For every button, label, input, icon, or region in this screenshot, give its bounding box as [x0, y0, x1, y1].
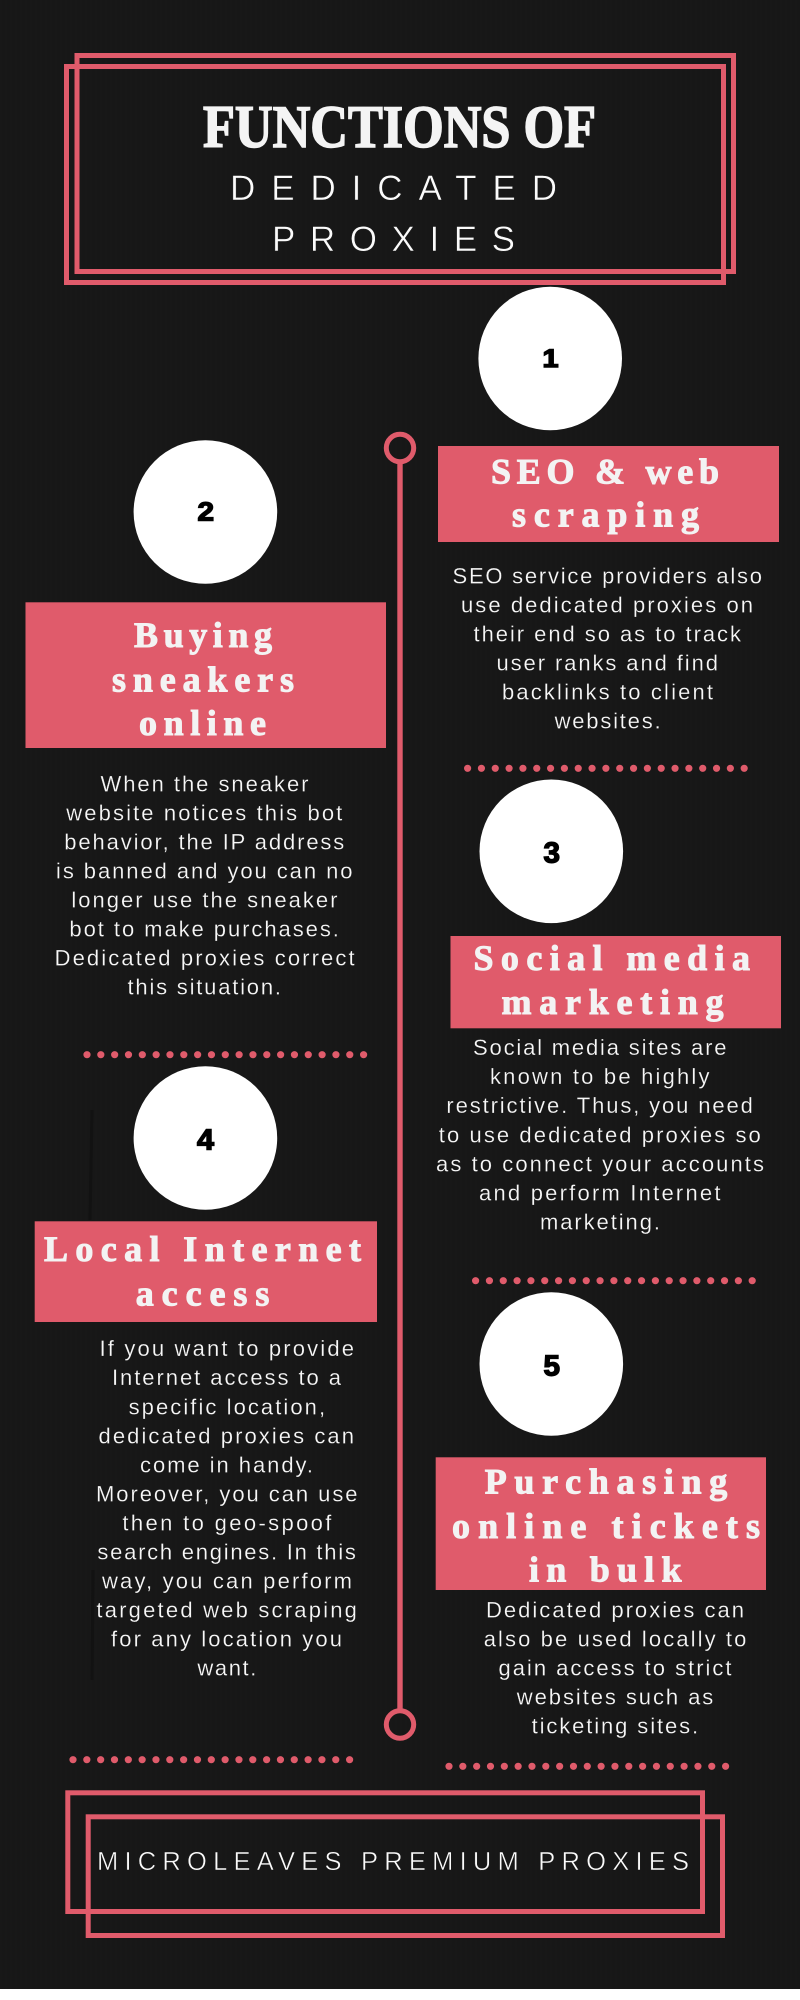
- body text 2: is banned and you can no: [56, 859, 352, 884]
- number circle 2: 2: [198, 496, 214, 526]
- heading box 2: Buying: [134, 615, 272, 655]
- dotted divider right 3: [449, 1763, 726, 1770]
- body text 5: gain access to strict: [498, 1655, 732, 1680]
- number circle 5: [480, 1292, 623, 1436]
- body text 1: backlinks to client: [502, 679, 713, 704]
- body text 2: longer use the sneaker: [71, 888, 337, 913]
- heading box 4: [35, 1221, 377, 1322]
- number circle 5: 5: [544, 1350, 560, 1382]
- body text 3: as to connect your accounts: [436, 1151, 764, 1176]
- body text 3: marketing.: [540, 1209, 660, 1234]
- body text 2: website notices this bot: [65, 801, 342, 826]
- header title frame: [66, 56, 734, 282]
- body text 2: behavior, the IP address: [64, 830, 344, 855]
- step 1: SEO and web scraping: [438, 287, 779, 733]
- body text 1: websites.: [554, 708, 661, 733]
- body text 4: Internet access to a: [112, 1365, 342, 1390]
- body text 5: ticketing sites.: [532, 1713, 698, 1738]
- body text 4: search engines. In this: [97, 1539, 356, 1564]
- body text 4: then to geo-spoof: [122, 1510, 332, 1535]
- body text 3: Social media sites are: [473, 1035, 726, 1060]
- body text 1: [452, 563, 762, 733]
- heading box 1: [438, 446, 779, 542]
- heading box 4: Local Internet: [44, 1229, 361, 1269]
- heading box 2: sneakers: [112, 660, 294, 700]
- body text 4: Moreover, you can use: [96, 1481, 358, 1506]
- body text 2: Dedicated proxies correct: [55, 946, 355, 971]
- step 3: social media marketing: [436, 780, 781, 1234]
- body text 5: Dedicated proxies can: [486, 1597, 744, 1622]
- title: dedicated: DEDICATED: [230, 169, 557, 208]
- heading box 5: online tickets: [452, 1506, 760, 1546]
- footer frame: [68, 1793, 723, 1936]
- number circle 2: [134, 440, 277, 584]
- number circle 1: 1: [542, 345, 559, 373]
- heading box 2: online: [139, 703, 266, 743]
- body text 4: dedicated proxies can: [98, 1423, 354, 1448]
- number circle 3: 3: [544, 838, 560, 870]
- step 5: purchasing online tickets in bulk: [436, 1292, 766, 1738]
- timeline: [386, 434, 414, 1738]
- dotted divider left 1: [87, 1051, 364, 1058]
- body text 3: restrictive. Thus, you need: [446, 1093, 753, 1118]
- heading box 4: access: [136, 1273, 269, 1313]
- body text 3: known to be highly: [490, 1064, 710, 1089]
- heading box 1: scraping: [512, 495, 699, 535]
- body text 2: this situation.: [128, 975, 281, 1000]
- number circle 4: 4: [197, 1124, 214, 1156]
- dotted divider right 1: [468, 765, 746, 772]
- body text 1: use dedicated proxies on: [461, 592, 753, 617]
- dotted divider right 2: [476, 1277, 753, 1284]
- heading box 2: [26, 602, 386, 748]
- body text 3: to use dedicated proxies so: [439, 1122, 761, 1147]
- body text 5: websites such as: [516, 1684, 713, 1709]
- heading box 3: marketing: [502, 982, 724, 1022]
- body text 4: targeted web scraping: [96, 1597, 357, 1622]
- heading box 5: Purchasing: [485, 1461, 727, 1501]
- heading box 3: Social media: [474, 938, 750, 978]
- heading box 1: SEO & web: [491, 451, 719, 491]
- body text 4: for any location you: [111, 1626, 342, 1652]
- body text 1: user ranks and find: [496, 650, 718, 675]
- body text 4: specific location,: [129, 1394, 325, 1419]
- body text 2: bot to make purchases.: [69, 917, 339, 942]
- footer text: MICROLEAVES PREMIUM PROXIES: [97, 1848, 689, 1876]
- body text 3: and perform Internet: [479, 1180, 720, 1205]
- body text 5: also be used locally to: [484, 1626, 746, 1651]
- body text 4: want.: [196, 1655, 256, 1680]
- body text 4: way, you can perform: [101, 1568, 352, 1593]
- body text 1: SEO service providers also: [452, 563, 762, 588]
- body text 5: [484, 1597, 746, 1738]
- title: proxies: PROXIES: [272, 220, 515, 259]
- title: functions of: FUNCTIONS OF: [203, 94, 596, 160]
- body text 2: When the sneaker: [100, 772, 308, 797]
- body text 1: their end so as to track: [474, 621, 742, 646]
- body text 4: If you want to provide: [100, 1336, 354, 1361]
- body text 4: come in handy.: [140, 1452, 313, 1477]
- body text 2: [55, 772, 355, 1000]
- body text 3: [436, 1035, 764, 1234]
- step 4: local internet access: [35, 1066, 377, 1680]
- heading box 5: [436, 1457, 766, 1590]
- heading box 3: [450, 936, 781, 1028]
- number circle 4: [134, 1066, 277, 1210]
- heading box 5: in bulk: [529, 1550, 682, 1590]
- body text 4: [96, 1336, 358, 1680]
- dotted divider left 2: [73, 1756, 350, 1763]
- number circle 3: [480, 780, 623, 923]
- step 2: buying sneakers online: [26, 440, 386, 1000]
- number circle 1: [478, 287, 622, 430]
